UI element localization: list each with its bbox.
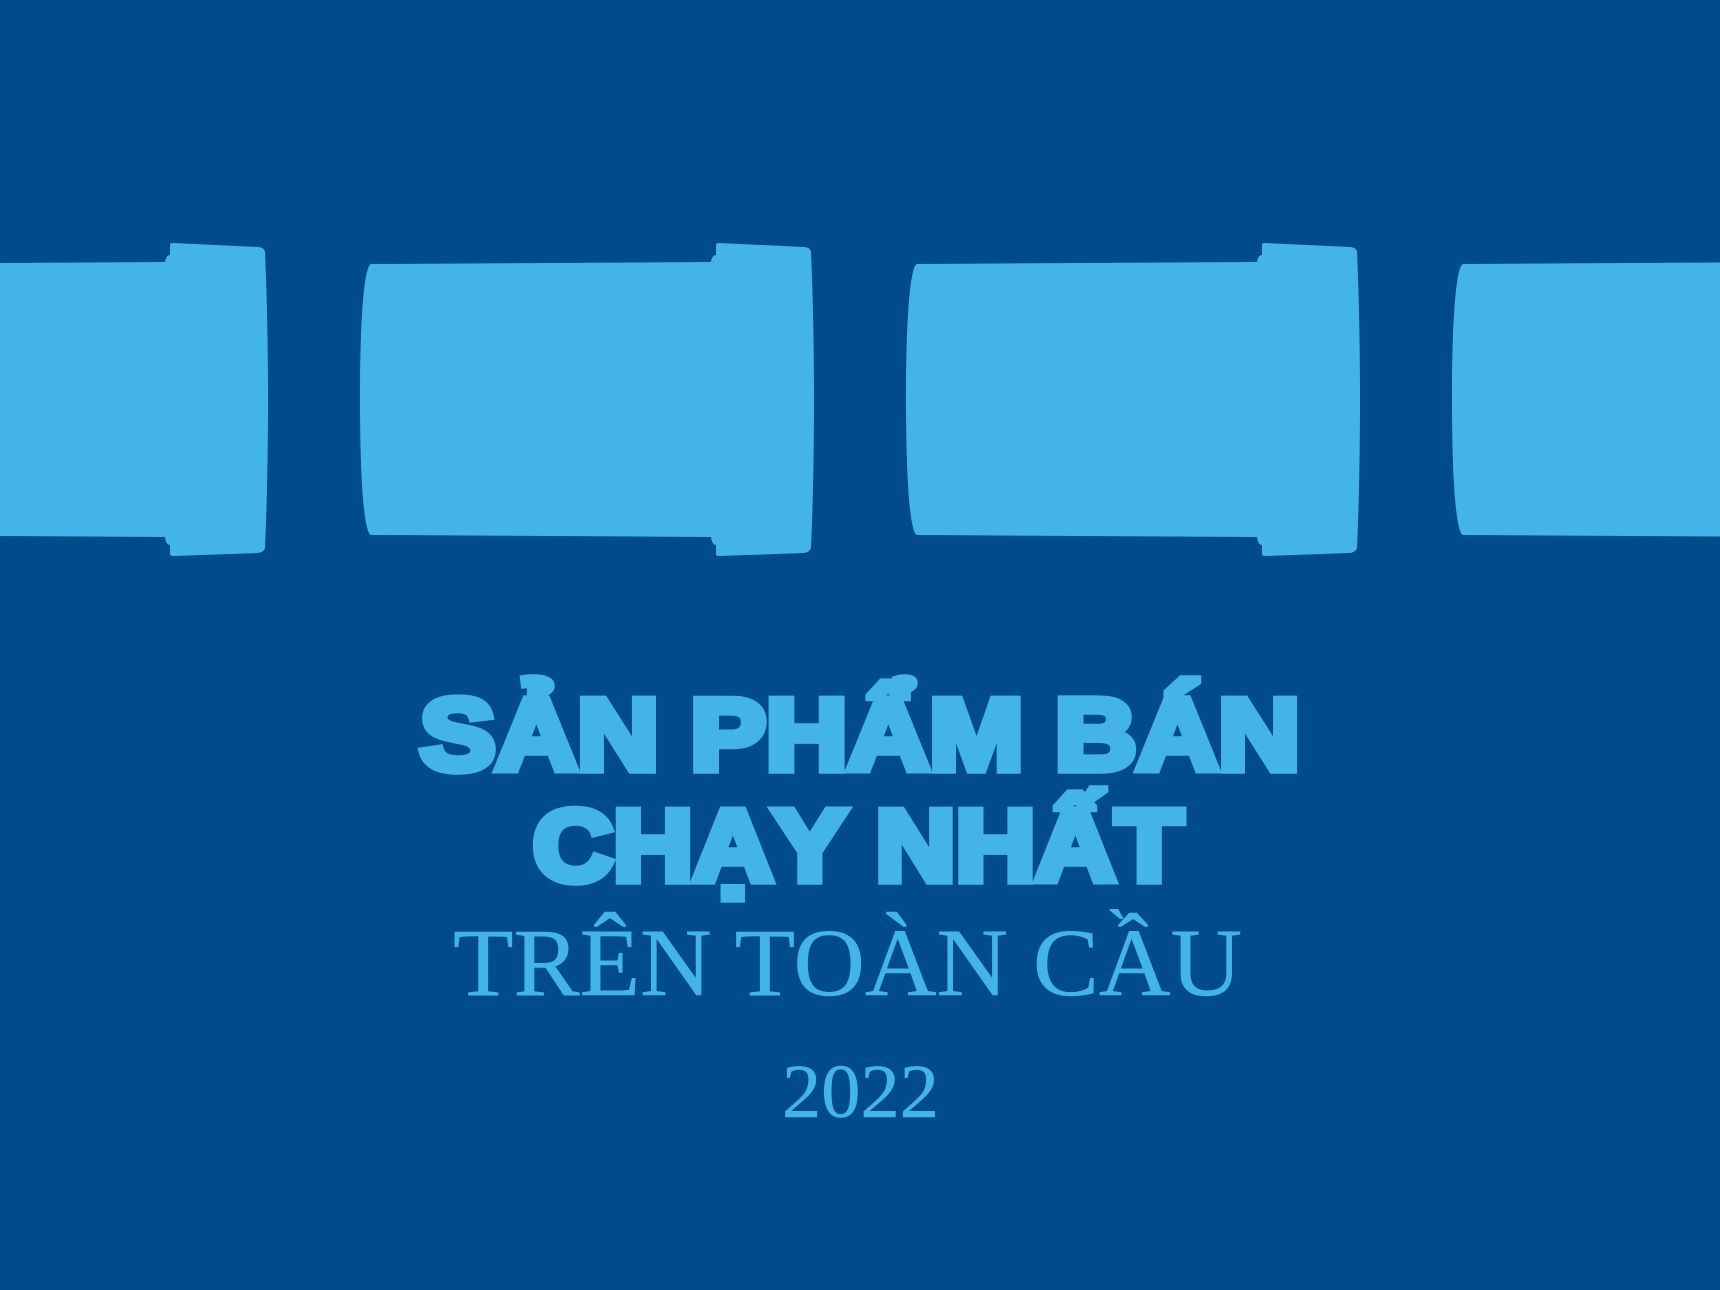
heading line 2: CHẠY NHẤT [533,790,1183,902]
year: 2022 [782,1050,939,1134]
title block [420,678,1300,1134]
icon: tube silhouette 4 [1452,243,1720,556]
subheading: TRÊN TOÀN CẦU [453,909,1242,1016]
product row: blue tube silhouettes [0,243,1720,556]
icon: tube silhouette 2 [360,243,814,556]
heading line 1: SẢN PHẨM BÁN [420,678,1300,792]
icon: tube silhouette 1 [0,243,268,556]
icon: tube silhouette 3 [906,243,1360,556]
